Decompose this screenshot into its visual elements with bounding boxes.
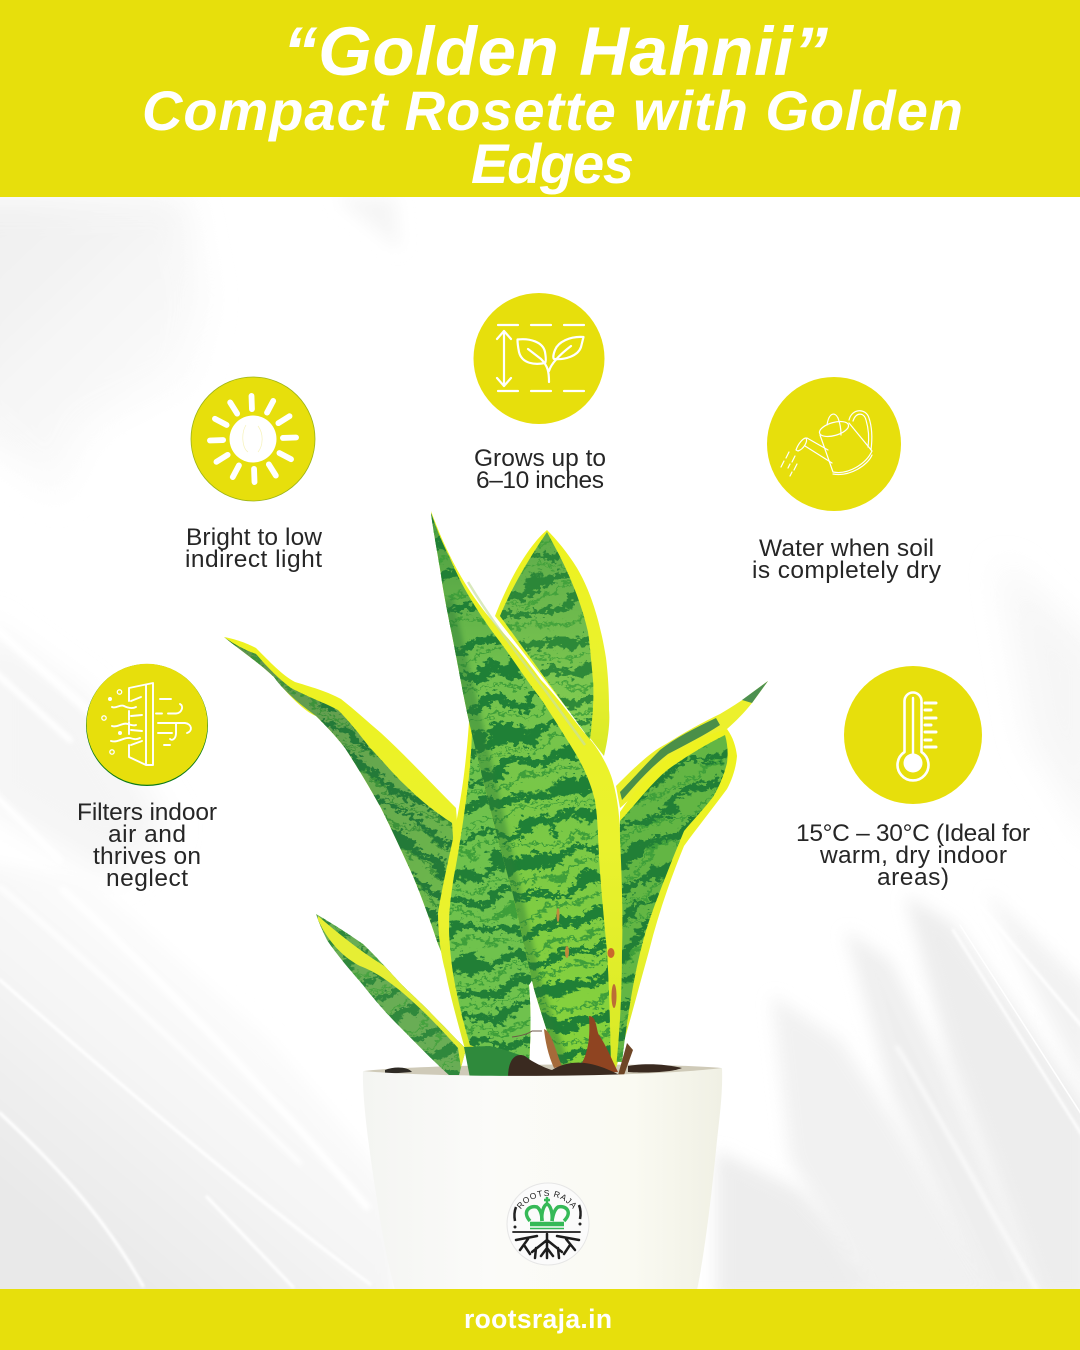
care item: temperature — [796, 666, 1030, 891]
label: air — [77, 799, 217, 892]
website: rootsraja.in — [464, 1304, 612, 1334]
label: size: 6–10 inches — [476, 467, 604, 494]
title line 3: Edges — [471, 132, 634, 195]
label: temperature: warm, dry indoor — [819, 842, 1007, 869]
sticker brand name: ROOTS RAJA — [516, 1190, 576, 1209]
label: light: indirect light — [185, 546, 322, 573]
label: air: air and — [108, 821, 186, 848]
label: air: Filters indoor — [77, 799, 217, 826]
label: water: Water when soil — [759, 535, 934, 562]
care item: size — [474, 293, 606, 494]
title line 1: “Golden Hahnii” — [283, 13, 828, 90]
icon: plant height — [474, 293, 604, 424]
label: size: Grows up to — [474, 445, 606, 472]
label: size — [474, 445, 606, 494]
leaf: middle lower — [438, 722, 532, 1076]
label: light — [185, 524, 322, 573]
icon: sun — [191, 377, 315, 501]
care item: water — [752, 377, 942, 584]
potted plant — [224, 511, 768, 1289]
roots — [513, 1232, 580, 1258]
header banner — [0, 0, 1080, 197]
icon: air filter — [86, 664, 208, 786]
leaf blemishes — [544, 908, 633, 1075]
leaf: small lower left — [316, 914, 465, 1075]
label: temperature: areas) — [877, 864, 949, 891]
label: water: is completely dry — [752, 557, 942, 584]
label: air: neglect — [106, 865, 188, 892]
pot back rim — [364, 1064, 721, 1078]
care item: air — [77, 664, 217, 892]
label: light: Bright to low — [186, 524, 322, 551]
label: temperature — [796, 820, 1030, 891]
crown — [526, 1197, 568, 1228]
icon: watering can — [767, 377, 901, 511]
title line 2: Compact Rosette with Golden — [142, 79, 963, 142]
care item: light — [185, 377, 322, 573]
footer banner — [0, 1289, 1080, 1350]
icon: thermometer — [844, 666, 982, 804]
sticker ring marks — [514, 1205, 582, 1228]
label: air: thrives on — [93, 843, 201, 870]
label: water — [752, 535, 942, 584]
label: temperature: 15°C – 30°C (Ideal for — [796, 820, 1030, 847]
leaf: thin right back — [616, 681, 768, 808]
leaf: right front — [610, 720, 740, 1070]
pot — [363, 1068, 722, 1290]
soil — [385, 1031, 682, 1078]
leaf: left — [224, 637, 457, 953]
leaf: front centre — [425, 505, 625, 1075]
pot sticker logo — [506, 1182, 590, 1266]
leaf: back centre — [495, 530, 610, 756]
